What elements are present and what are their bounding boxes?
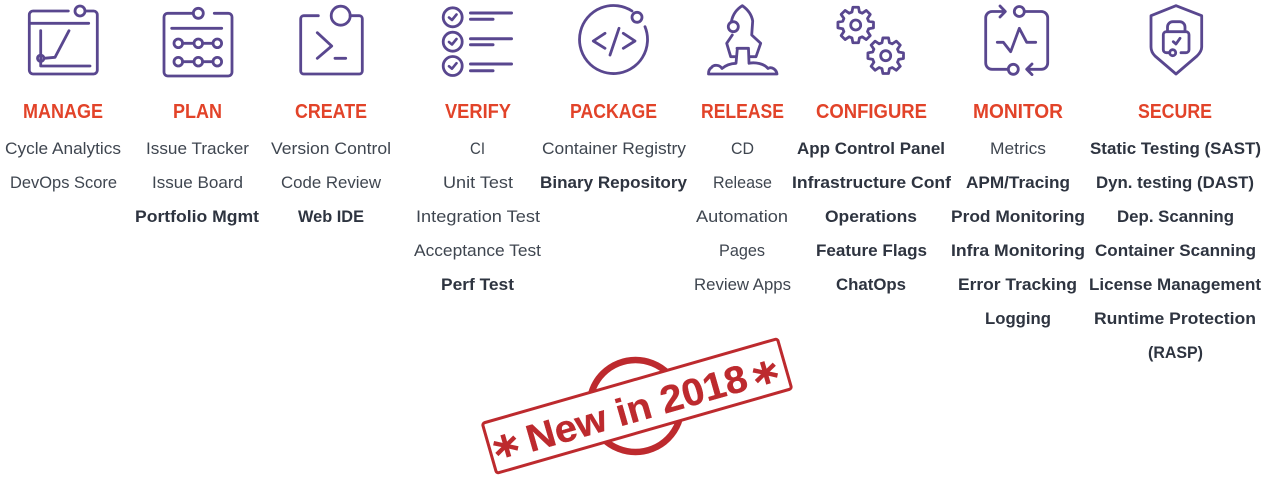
feature list: configure: Feature Flags bbox=[816, 241, 927, 260]
feature list: monitor: Error Tracking bbox=[958, 275, 1077, 294]
panel: package bbox=[540, 6, 688, 192]
heading: configure: CONFIGURE bbox=[816, 101, 927, 123]
feature list: release bbox=[694, 139, 791, 294]
heading: manage: MANAGE bbox=[23, 101, 103, 123]
feature list: create: Code Review bbox=[281, 173, 382, 192]
stamp: new in 2018: New in 2018 bbox=[521, 358, 752, 461]
heading: create: CREATE bbox=[295, 101, 367, 123]
heading: package: PACKAGE bbox=[570, 101, 657, 123]
feature list: verify: Unit Test bbox=[443, 173, 513, 192]
feature list: manage: Cycle Analytics bbox=[5, 139, 121, 158]
feature list: monitor: Logging bbox=[985, 309, 1051, 328]
icon: rocket bbox=[708, 6, 777, 74]
feature list: verify: Perf Test bbox=[441, 275, 514, 294]
feature list: create bbox=[271, 139, 391, 226]
feature list: secure: Container Scanning bbox=[1095, 241, 1256, 260]
icon: monitoring loop bbox=[986, 6, 1048, 75]
heading: plan: PLAN bbox=[173, 101, 222, 123]
feature list: secure: License Management bbox=[1089, 275, 1261, 294]
feature list: plan: Issue Tracker bbox=[146, 139, 249, 158]
feature list: secure: Static Testing (SAST) bbox=[1090, 139, 1261, 158]
feature list: manage bbox=[5, 139, 121, 192]
feature list: verify: Acceptance Test bbox=[414, 241, 541, 260]
feature list: plan: Portfolio Mgmt bbox=[135, 207, 259, 226]
feature list: configure: App Control Panel bbox=[797, 139, 945, 158]
feature list: create: Web IDE bbox=[298, 207, 364, 226]
stamp: new in 2018 bbox=[482, 339, 796, 478]
feature list: monitor bbox=[951, 139, 1085, 328]
icon: board bbox=[164, 8, 232, 76]
feature list: package: Container Registry bbox=[542, 139, 687, 158]
panel: secure bbox=[1089, 6, 1261, 362]
panel: create bbox=[271, 6, 391, 226]
icon: checklist bbox=[443, 8, 512, 75]
icon: shield lock bbox=[1151, 6, 1202, 74]
feature list: monitor: Infra Monitoring bbox=[951, 241, 1085, 260]
feature list: secure bbox=[1089, 139, 1261, 362]
icon: gears bbox=[838, 7, 903, 73]
feature list: release: Pages bbox=[719, 241, 765, 260]
feature list: secure: (RASP) bbox=[1148, 343, 1203, 362]
icon: chart window bbox=[29, 6, 97, 74]
heading: verify: VERIFY bbox=[445, 101, 512, 123]
feature list: manage: DevOps Score bbox=[10, 173, 117, 192]
icon: terminal bbox=[301, 6, 362, 74]
feature list: release: Review Apps bbox=[694, 275, 791, 294]
panel: plan bbox=[135, 8, 259, 226]
feature list: release: Automation bbox=[696, 207, 788, 226]
panel: manage bbox=[5, 6, 121, 192]
stamp: new in 2018: * bbox=[748, 351, 787, 411]
feature list: create: Version Control bbox=[271, 139, 391, 158]
feature list: monitor: APM/Tracing bbox=[966, 173, 1070, 192]
heading: secure: SECURE bbox=[1138, 101, 1212, 123]
heading: monitor: MONITOR bbox=[973, 101, 1064, 123]
panel: release bbox=[694, 6, 791, 294]
feature list: plan: Issue Board bbox=[152, 173, 243, 192]
feature list: verify: Integration Test bbox=[416, 207, 540, 226]
feature list: configure: Infrastructure Conf bbox=[792, 173, 951, 192]
feature list: secure: Runtime Protection bbox=[1094, 309, 1256, 328]
feature list: configure bbox=[792, 139, 951, 294]
feature list: monitor: Metrics bbox=[990, 139, 1046, 158]
feature list: configure: Operations bbox=[825, 207, 917, 226]
feature list: package: Binary Repository bbox=[540, 173, 688, 192]
feature list: secure: Dyn. testing (DAST) bbox=[1096, 173, 1254, 192]
feature list: monitor: Prod Monitoring bbox=[951, 207, 1085, 226]
panel: configure bbox=[792, 7, 951, 294]
feature list: plan bbox=[135, 139, 259, 226]
panel: verify bbox=[414, 8, 541, 294]
heading: release: RELEASE bbox=[701, 101, 784, 123]
feature list: verify bbox=[414, 139, 541, 294]
panel: monitor bbox=[951, 6, 1085, 328]
feature list: release: CD bbox=[731, 139, 754, 158]
feature list: configure: ChatOps bbox=[836, 275, 906, 294]
icon: code circle bbox=[580, 6, 648, 74]
feature list: verify: CI bbox=[470, 139, 485, 158]
feature list: release: Release bbox=[713, 173, 772, 192]
feature list: secure: Dep. Scanning bbox=[1117, 207, 1234, 226]
feature list: package bbox=[540, 139, 688, 192]
